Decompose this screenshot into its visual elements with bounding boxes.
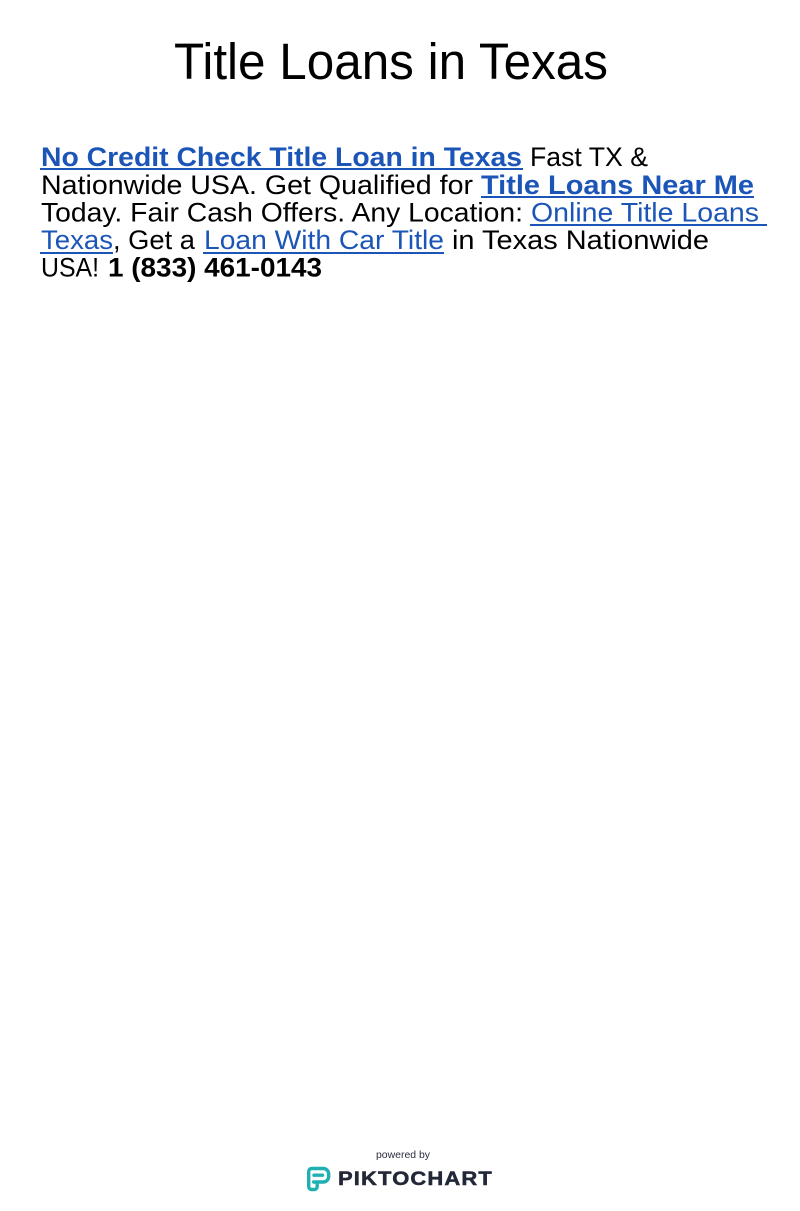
text block: description paragraph: , Get a: [113, 225, 196, 255]
text block: description paragraph: USA!: [41, 252, 99, 282]
text block: description paragraph: No Credit Check Title Loan in Texas: [41, 142, 522, 172]
icon: Piktochart logo mark: [309, 1168, 329, 1190]
Piktochart wordmark: PIKTOCHART: [338, 1168, 493, 1190]
text block: description paragraph: in Texas Nationwide: [452, 225, 709, 255]
title: Title Loans in Texas: [174, 33, 608, 90]
footer: powered by Piktochart: [309, 1150, 493, 1190]
text block: description paragraph: Online Title Loans: [531, 198, 759, 228]
powered by label: powered by: [376, 1150, 430, 1161]
text block: description paragraph: Nationwide USA. Get Qualified for: [41, 170, 473, 200]
text block: description paragraph: Today. Fair Cash Offers. Any Location:: [41, 198, 523, 228]
text block: description paragraph: 1 (833) 461-0143: [108, 252, 322, 282]
text block: description paragraph: Fast TX &: [530, 142, 648, 172]
text block: description paragraph: Title Loans Near Me: [481, 170, 754, 200]
text block: description paragraph: [40, 142, 767, 282]
text block: description paragraph: Texas: [41, 225, 113, 255]
text block: description paragraph: Loan With Car Title: [204, 225, 444, 255]
